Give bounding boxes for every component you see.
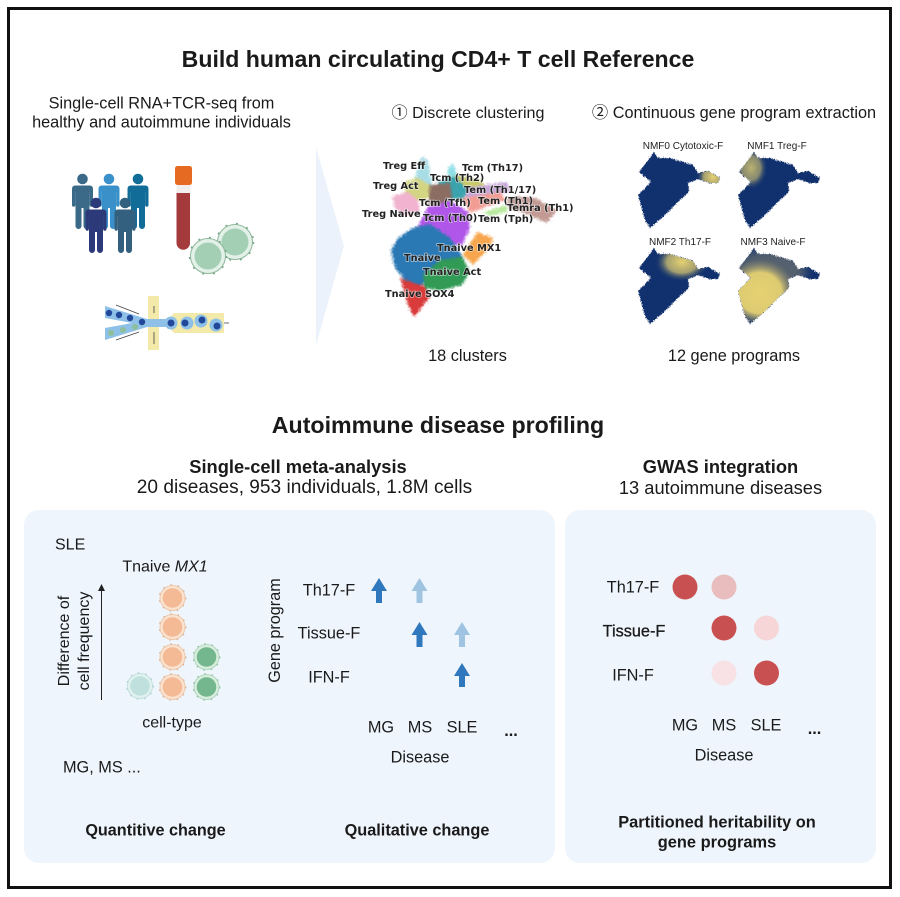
heading: continuous gene program extraction: ② Continuous gene program extraction <box>592 104 876 122</box>
cluster labels: Tcm (Th17) <box>462 163 523 174</box>
heading: autoimmune disease profiling: Autoimmune disease profiling <box>272 412 604 438</box>
caption: partitioned heritability: Partitioned heritability on <box>618 814 816 832</box>
plot: NMF3 Naive-F <box>738 238 820 325</box>
axis label: difference of cell frequency: Difference of <box>56 596 73 686</box>
label: other diseases: MG, MS ... <box>63 758 141 776</box>
caption: 18 clusters: 18 clusters <box>428 347 507 365</box>
row labels: gene programs: Tissue-F <box>298 624 360 642</box>
cell stack: frequency dots <box>127 585 220 700</box>
text: data source: healthy and autoimmune individuals <box>32 114 291 132</box>
caption: partitioned heritability: gene programs <box>658 834 776 852</box>
row labels: gene programs: IFN-F <box>308 668 350 686</box>
heading: GWAS integration: GWAS integration <box>643 456 798 477</box>
cluster labels: Tem (Th1) <box>478 196 533 207</box>
cluster labels: Tcm (Tfh) <box>419 198 471 209</box>
column labels: diseases <box>368 718 518 740</box>
cluster labels: Temra (Th1) <box>507 203 574 214</box>
cluster labels: Treg Act <box>373 181 419 192</box>
icon: group of people <box>72 174 148 253</box>
row labels: gene programs: Th17-F <box>607 578 659 596</box>
axis label: gene program: Gene program <box>266 578 284 683</box>
cluster labels: Tem (Th1/17) <box>464 185 536 196</box>
column labels: diseases: ... <box>808 720 821 738</box>
row labels: gene programs: Tissue-F <box>603 622 665 640</box>
caption: qualitative change: Qualitative change <box>345 822 489 840</box>
column labels: diseases <box>672 716 821 738</box>
arrow: workflow chevron <box>316 147 344 345</box>
text: data source: Single-cell RNA+TCR-seq from <box>49 94 274 112</box>
plot: NMF1 Treg-F <box>734 141 820 228</box>
cluster labels: Tnaive Act <box>423 267 481 278</box>
column labels: diseases: MG <box>368 718 394 736</box>
cluster labels: Tnaive MX1 <box>437 243 501 254</box>
feature plots: gene programs <box>638 141 820 327</box>
panel: GWAS integration <box>565 510 876 863</box>
title: reference: Build human circulating CD4+ T cell Reference <box>182 46 694 72</box>
cluster labels: Tnaive <box>404 253 441 264</box>
icon: microfluidic droplet chip <box>105 296 229 350</box>
plot: NMF2 Th17-F: NMF2 Th17-F <box>649 237 711 248</box>
row labels: gene programs <box>298 582 360 686</box>
plot: NMF1 Treg-F: NMF1 Treg-F <box>747 141 807 152</box>
plot: NMF3 Naive-F: NMF3 Naive-F <box>740 237 806 248</box>
icon: blood tube <box>175 166 192 250</box>
panel: single-cell meta-analysis <box>24 510 555 863</box>
arrow: frequency axis <box>98 584 105 700</box>
icon: lymphocytes <box>190 224 254 274</box>
axis label: disease: Disease <box>391 748 449 766</box>
caption: quantitive change: Quantitive change <box>85 822 226 840</box>
column labels: diseases: MG <box>672 716 698 734</box>
axis label: difference of cell frequency: cell frequency <box>76 592 93 690</box>
label: SLE: SLE <box>55 536 85 554</box>
cluster labels: Tem (Tph) <box>478 214 533 225</box>
cluster labels: Treg Eff <box>383 161 426 172</box>
dot matrix: heritability enrichment <box>672 574 779 686</box>
heading: GWAS integration: 13 autoimmune diseases <box>619 477 822 498</box>
cluster labels <box>362 161 574 300</box>
plot: NMF0 Cytotoxic-F: NMF0 Cytotoxic-F <box>643 141 723 152</box>
axis label: cell-type: cell-type <box>142 714 202 732</box>
heading: discrete clustering: ① Discrete clustering <box>392 104 544 122</box>
heading: single-cell meta-analysis: 20 diseases, 953 individuals, 1.8M cells <box>137 477 472 498</box>
cluster labels: Treg Naive <box>362 209 421 220</box>
heading: single-cell meta-analysis: Single-cell meta-analysis <box>189 456 407 477</box>
plot: NMF2 Th17-F <box>638 237 720 324</box>
row labels: gene programs <box>603 578 665 684</box>
column labels: diseases: MS <box>408 718 432 736</box>
cluster labels: Tcm (Th2) <box>430 173 484 184</box>
plot: NMF0 Cytotoxic-F <box>638 141 730 228</box>
cluster labels: Tnaive SOX4 <box>385 289 455 300</box>
column labels: diseases: SLE <box>751 716 782 734</box>
cluster labels: Tcm (Th0) <box>423 213 477 224</box>
arrows: program upregulation <box>371 578 470 687</box>
row labels: gene programs: Th17-F <box>303 582 355 600</box>
column labels: diseases: ... <box>504 722 518 740</box>
row labels: gene programs: IFN-F <box>612 666 654 684</box>
label: Tnaive MX1: Tnaive MX1 <box>122 558 208 576</box>
column labels: diseases: SLE <box>447 718 478 736</box>
axis label: disease: Disease <box>695 746 753 764</box>
caption: 12 gene programs: 12 gene programs <box>668 347 800 365</box>
UMAP: 18 clusters <box>362 156 574 317</box>
column labels: diseases: MS <box>712 716 736 734</box>
